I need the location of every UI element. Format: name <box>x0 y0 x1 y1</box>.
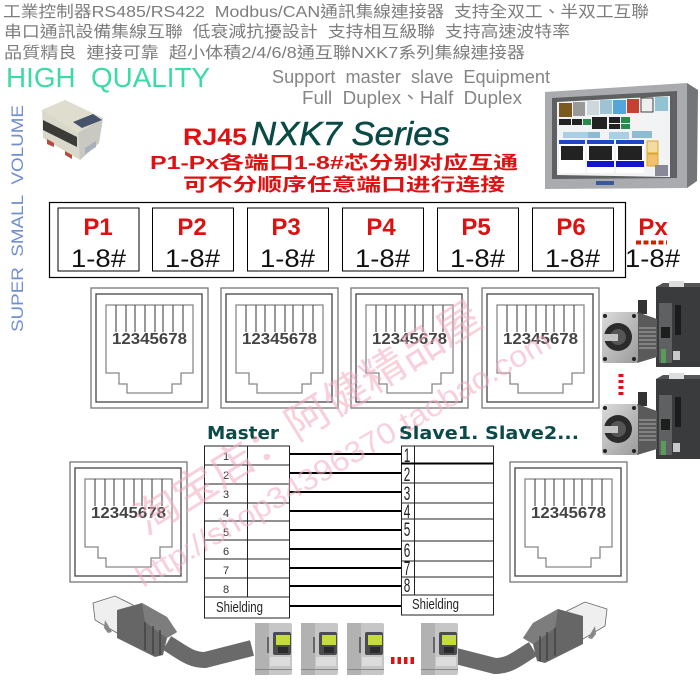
header text block: 品質精良 連接可靠 超小体積2/4/6/8通互聯NXK7系列集線連接器 <box>4 44 525 62</box>
port P4: 1-8# <box>355 245 410 273</box>
header text block: 串口通訊設備集線互聯 低衰減抗擾設計 支持相互級聯 支持高速波特率 <box>4 22 570 41</box>
port P2 <box>152 208 234 273</box>
port Px: Px <box>638 214 668 241</box>
wiring lines <box>289 454 401 606</box>
master pin table: 3 <box>223 489 229 501</box>
port P5: 1-8# <box>450 245 505 273</box>
port P3: P3 <box>271 214 301 241</box>
icon: left RJ45 plug and cable <box>93 596 252 660</box>
watermark: http://shop34396370.taobao.com <box>130 325 557 594</box>
RJ45 jack right: 12345678 <box>531 505 606 522</box>
master pin table: Shielding <box>216 599 263 616</box>
port P4 <box>342 208 424 273</box>
port Px: 1-8# <box>625 245 680 273</box>
slave pin table: Shielding <box>412 596 459 613</box>
master pin table: 6 <box>223 546 229 558</box>
heading: Master: Master <box>207 423 279 444</box>
port P6: P6 <box>556 214 586 241</box>
master pin table: 1 <box>223 451 229 463</box>
slave pin table <box>401 446 494 615</box>
port P6 <box>532 208 614 273</box>
port P5: P5 <box>461 214 491 241</box>
slave pin table: 7 <box>404 559 410 580</box>
RJ45 jack 1: 12345678 <box>112 331 187 348</box>
RJ45 jack right <box>510 462 627 582</box>
port P1: P1 <box>83 214 113 241</box>
master pin table <box>204 446 290 618</box>
icon: inverter 4 <box>421 623 458 675</box>
screen data panels <box>559 140 668 176</box>
support text block: Support master slave Equipment <box>272 67 550 87</box>
heading: NXK7 Series: NXK7 Series <box>251 115 450 152</box>
port P6: 1-8# <box>545 245 600 273</box>
port P2: 1-8# <box>165 245 220 273</box>
RJ45 jack 1 <box>91 288 208 408</box>
master pin table: 7 <box>223 565 229 577</box>
RJ45 jack 4: 12345678 <box>503 331 578 348</box>
RJ45 jack 3: 12345678 <box>372 331 447 348</box>
vertical label: super small volume: SUPER SMALL VOLUME <box>8 105 27 332</box>
slave pin table: 1 <box>404 446 410 467</box>
icon: servo drive 2 <box>602 373 700 459</box>
red description text <box>150 152 518 195</box>
port P4: P4 <box>366 214 396 241</box>
port P1: 1-8# <box>71 245 126 273</box>
icon: servo drive 1 <box>602 281 700 367</box>
icon: right RJ45 plug and cable <box>448 602 607 666</box>
red description text: P1-Px各端口1-8#芯分别对应互通 <box>150 152 518 173</box>
heading: Slave: Slave1. Slave2... <box>399 423 579 444</box>
master pin table: 5 <box>223 527 229 539</box>
RJ45 jack 2: 12345678 <box>242 331 317 348</box>
red description text: 可不分顺序任意端口进行连接 <box>183 174 505 195</box>
watermark: 淘宝店：阿健精品屋 <box>126 292 490 544</box>
RJ45 jack 4 <box>482 288 599 408</box>
icon: inverter 1 <box>255 623 292 675</box>
icon: red vertical dots <box>618 374 624 395</box>
support text block: Full Duplex、Half Duplex <box>302 88 522 108</box>
slave pin table: 8 <box>404 576 410 597</box>
support text block <box>272 67 550 108</box>
RJ45 jack left <box>70 462 187 582</box>
slave pin table: 5 <box>404 520 410 541</box>
port P3: 1-8# <box>260 245 315 273</box>
header text block <box>3 2 649 62</box>
master pin table: 2 <box>223 470 229 482</box>
master pin table: 4 <box>223 508 229 520</box>
icon: inverter 3 <box>347 623 384 675</box>
heading: high quality: HIGH QUALITY <box>6 62 210 93</box>
port Px <box>625 214 680 273</box>
slave pin table: 4 <box>404 502 410 523</box>
icon: PLC module <box>42 100 103 160</box>
icon: red horizontal dots <box>391 657 414 664</box>
icon: inverter 2 <box>301 623 338 675</box>
port P5 <box>438 208 518 273</box>
RJ45 jack left: 12345678 <box>91 505 166 522</box>
port P2: P2 <box>177 214 207 241</box>
port P3 <box>248 208 328 273</box>
icon: HMI touch panel <box>545 83 698 189</box>
RJ45 jack 3 <box>351 288 468 408</box>
header text block: 工業控制器RS485/RS422 Modbus/CAN通訊集線連接器 支持全双工、半双工互聯 <box>3 2 649 21</box>
slave pin table: 6 <box>404 541 410 562</box>
port P1 <box>58 208 139 273</box>
heading: RJ45: RJ45 <box>183 124 247 151</box>
slave pin table: 3 <box>404 484 410 505</box>
screen status widgets <box>559 117 652 139</box>
slave pin table: 2 <box>404 465 410 486</box>
RJ45 jack 2 <box>221 288 338 408</box>
panel: port row <box>50 202 626 278</box>
screen top icon row <box>559 97 668 117</box>
master pin table: 8 <box>223 584 229 596</box>
